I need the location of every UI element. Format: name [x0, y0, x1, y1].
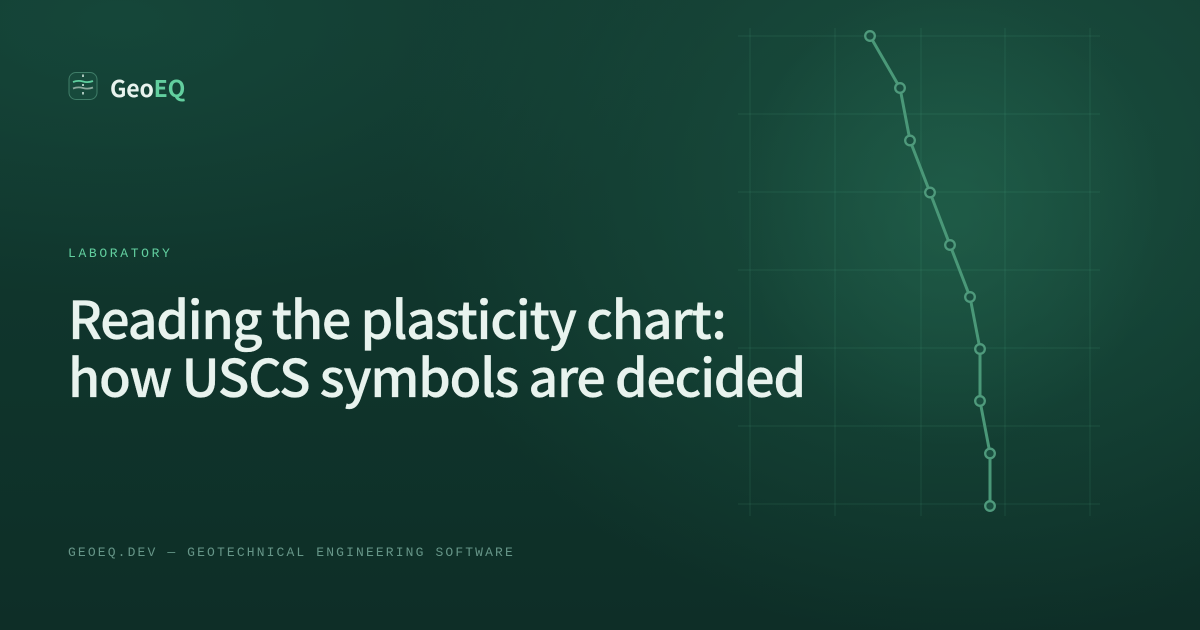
data points: [865, 31, 995, 511]
icon: logo mark: [68, 72, 98, 100]
title: [68, 279, 805, 412]
wordmark: GeoEQ: [110, 70, 185, 104]
title: how USCS symbols are decided: [68, 337, 805, 412]
category label: LABORATORY: [68, 246, 173, 261]
footer: GEOEQ.DEV — GEOTECHNICAL ENGINEERING SOFTWARE: [68, 545, 515, 560]
title: Reading the plasticity chart:: [68, 279, 725, 354]
logo: [68, 70, 185, 104]
profile line: [870, 36, 990, 506]
